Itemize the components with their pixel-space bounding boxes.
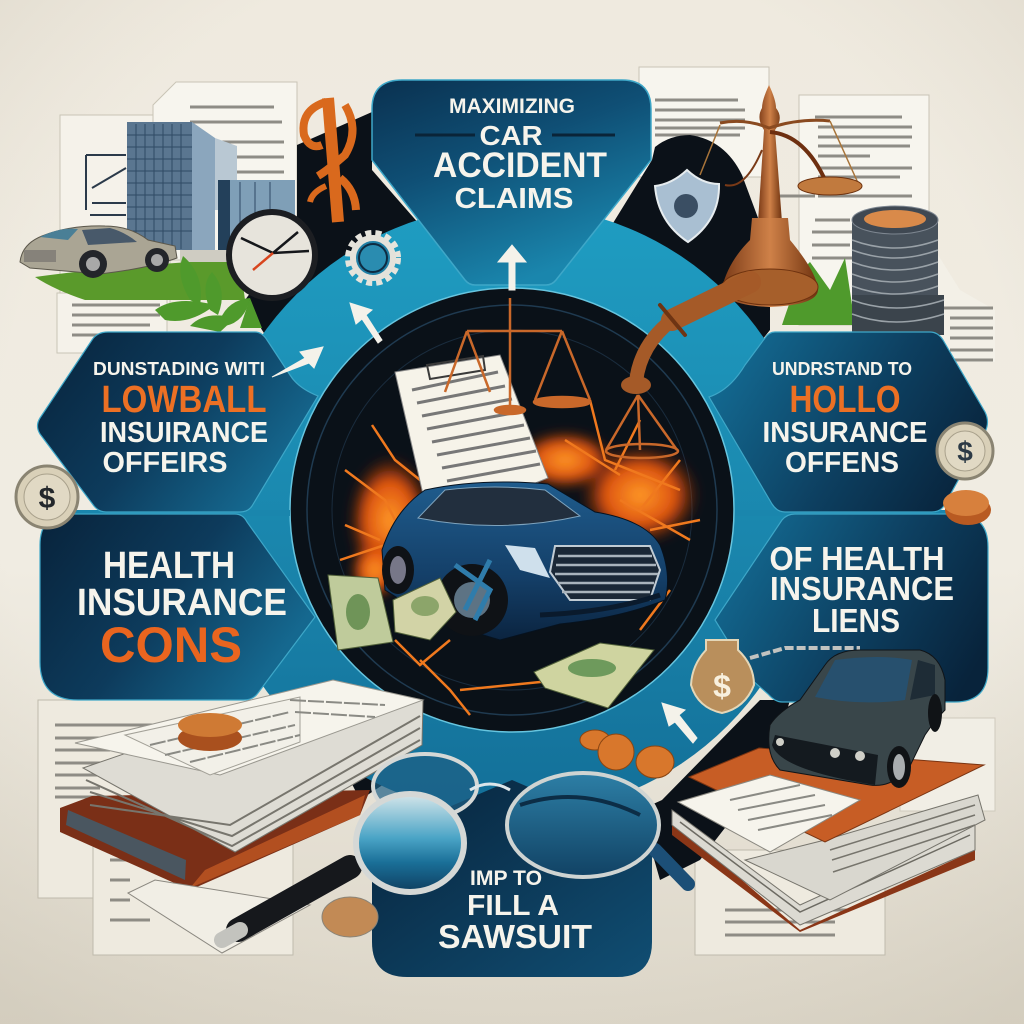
panel: health insurance cons: HEALTH	[103, 545, 235, 587]
panel: health insurance cons	[40, 514, 315, 700]
icon: shield	[655, 170, 719, 242]
icon: copper coin	[322, 897, 378, 937]
icon: money bag and chain	[691, 640, 860, 713]
panel: low-ball offers: INSUIRANCE	[100, 417, 268, 449]
icon: magnifying glass	[222, 794, 464, 940]
arrows	[272, 245, 697, 743]
office building	[127, 122, 295, 264]
icon: coin left: $	[39, 482, 56, 515]
panel: holl offers: OFFENS	[785, 447, 899, 479]
icon: glasses	[373, 754, 688, 884]
icon: bronze scale top right	[700, 85, 862, 307]
icon: coins centre bottom	[580, 730, 674, 778]
icon: coin stack	[852, 206, 944, 335]
strips between side panels	[60, 510, 960, 516]
fire burst	[348, 430, 700, 600]
icon: coins right: $	[957, 436, 973, 467]
panel: low-ball offers: LOWBALL	[102, 379, 266, 421]
ring	[207, 205, 817, 815]
heading: ACCIDENT	[433, 146, 607, 185]
panel: low-ball offers: OFFEIRS	[102, 447, 228, 479]
panel: bottom lawsuit	[372, 780, 652, 977]
heading	[433, 95, 607, 215]
panel: health insurance cons: CONS	[100, 617, 242, 673]
icon: cash stack left	[328, 575, 456, 650]
center circle	[290, 288, 734, 732]
panel: health insurance liens: LIENS	[812, 602, 900, 639]
panel: low-ball offers: DUNSTADING WITI	[93, 358, 265, 379]
panel: top	[372, 80, 651, 285]
icon: book stack left	[60, 680, 423, 890]
icon: book stack right	[672, 748, 985, 932]
panel: holl offers: HOLLO	[790, 379, 900, 421]
icon: scales in centre	[445, 298, 678, 458]
black backing shapes	[245, 112, 790, 880]
arrow: left upper 2	[350, 303, 382, 343]
panel: health insurance liens	[715, 514, 988, 702]
panel: holl offers	[709, 332, 988, 512]
icon: pipe gavel	[621, 282, 750, 394]
icon: clock	[226, 209, 318, 301]
icon: wrecked car	[382, 482, 668, 640]
icon: plant leaves	[155, 256, 855, 332]
arrow: top	[498, 245, 526, 290]
panel: holl offers: INSURANCE	[762, 417, 928, 449]
arrow: lower right	[662, 703, 697, 743]
icon: coin left	[16, 466, 78, 528]
panel: health insurance cons: INSURANCE	[77, 582, 287, 624]
panel: health insurance liens: OF HEALTH	[770, 540, 944, 577]
panel: bottom lawsuit: IMP TO	[470, 867, 542, 890]
heading: CLAIMS	[454, 183, 574, 215]
heading: MAXIMIZING	[449, 95, 575, 118]
panel: holl offers: UNDRSTAND TO	[772, 358, 912, 379]
icon: cash stack right	[534, 643, 654, 708]
icon: money bag and chain: $	[713, 668, 731, 704]
panel: low-ball offers	[38, 332, 318, 512]
icon: coins right	[937, 423, 993, 525]
icon: paper under magnifier	[128, 880, 310, 953]
icon: orange section symbol	[303, 98, 356, 222]
icon: silver car	[20, 226, 177, 278]
heading: CAR	[480, 120, 542, 151]
grass	[35, 262, 245, 300]
lava cracks	[340, 400, 700, 715]
panel: health insurance liens: INSURANCE	[770, 570, 954, 607]
arrow: left upper	[272, 347, 323, 377]
icon: dark car right	[769, 650, 945, 788]
icon: clipboard document	[395, 355, 548, 525]
icon: gear	[348, 233, 398, 283]
panel: bottom lawsuit: FILL A	[467, 890, 559, 922]
panel: bottom lawsuit: SAWSUIT	[438, 918, 592, 955]
